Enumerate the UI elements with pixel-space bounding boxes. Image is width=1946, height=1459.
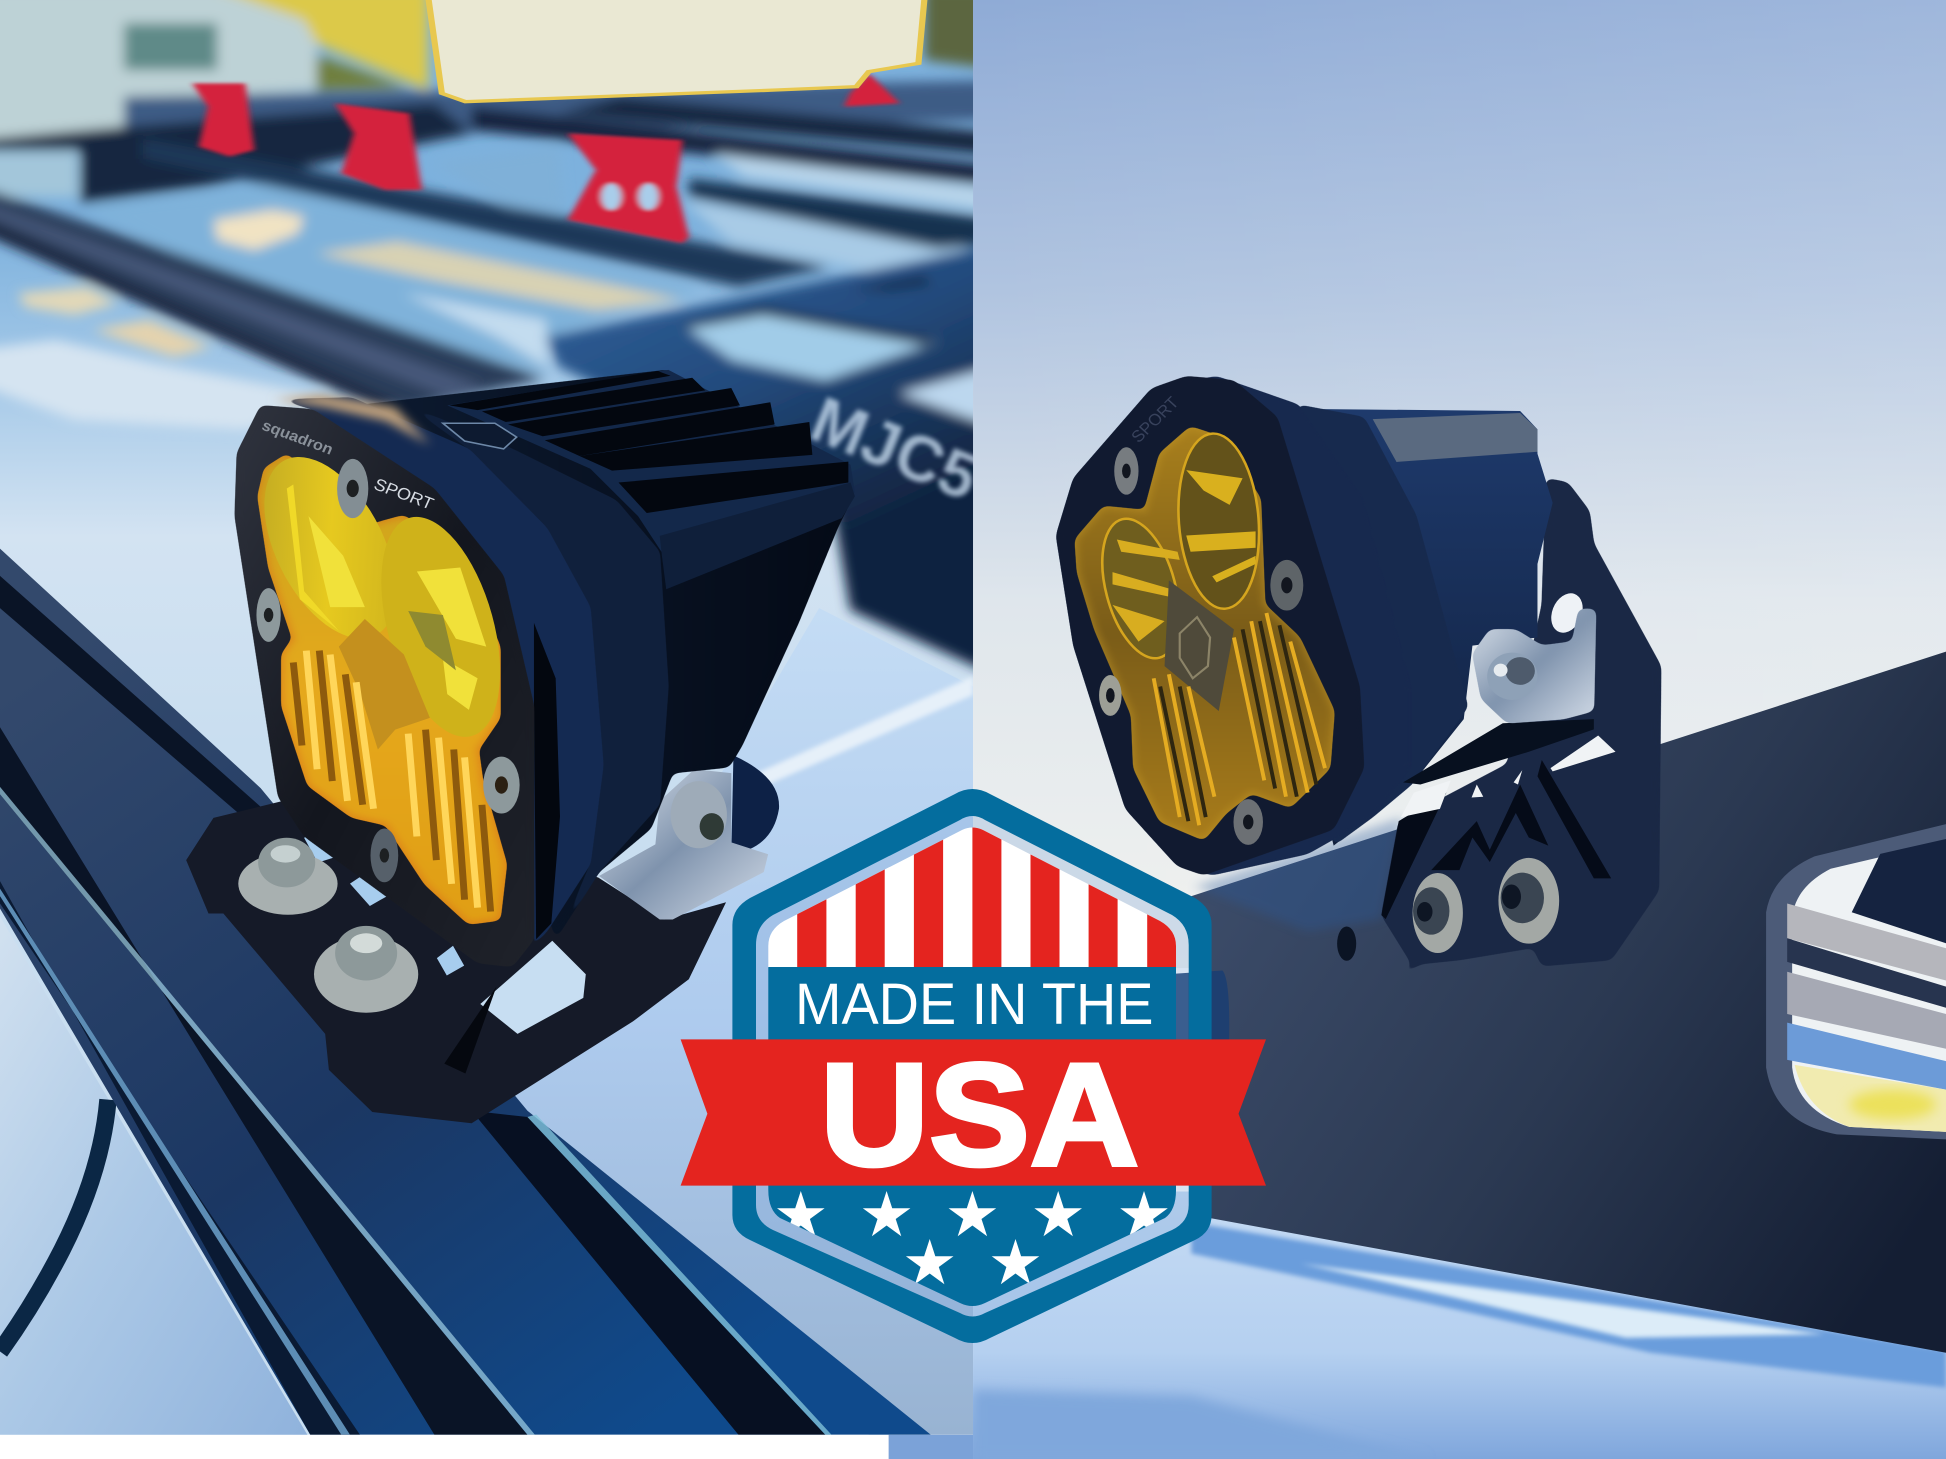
collar black seam bbox=[534, 623, 560, 939]
left lamp bbox=[235, 370, 855, 967]
bracket plate bbox=[1381, 478, 1661, 987]
lower left roof surface bbox=[0, 906, 310, 1440]
centre lens hub bbox=[339, 619, 430, 749]
sky background bbox=[973, 0, 1946, 968]
upper right reflector bbox=[360, 506, 522, 748]
yellow sign side bbox=[211, 0, 428, 90]
building bbox=[0, 0, 316, 140]
blurred rear roof rack scene bbox=[0, 0, 1005, 680]
platform lettering: MJC5 bbox=[801, 383, 988, 514]
plate bolt lower bbox=[314, 926, 418, 1013]
front roof rail bbox=[0, 549, 931, 1435]
platform opening bbox=[683, 308, 937, 380]
lower lens ribs bbox=[293, 651, 491, 912]
top reflector lobe bbox=[1172, 431, 1265, 611]
blue field bbox=[768, 967, 1178, 1312]
black mounting bar bbox=[1191, 652, 1946, 1353]
building window bbox=[124, 23, 217, 70]
panel: right product photo bbox=[889, 0, 1946, 1459]
strip under sign bbox=[124, 80, 1005, 140]
body collar bbox=[1273, 405, 1468, 846]
black cable bbox=[0, 1100, 108, 1352]
lower bolt right bbox=[1498, 858, 1559, 944]
cream sign panel bbox=[428, 0, 925, 102]
lens mounting screws bbox=[1099, 447, 1303, 845]
patches between bars bbox=[714, 153, 1005, 213]
left roof reflections bbox=[19, 287, 118, 315]
fin tops bbox=[447, 370, 855, 556]
reflector highlights bbox=[308, 516, 486, 710]
lens ribs bbox=[1154, 613, 1325, 825]
red ribbon bbox=[681, 1039, 1266, 1186]
left reflector lobe bbox=[1089, 511, 1193, 666]
made in the USA badge bbox=[681, 789, 1266, 1343]
collar outer band bbox=[408, 405, 668, 935]
rail with red mounts bbox=[143, 138, 832, 287]
lower fin ribs bbox=[660, 483, 855, 589]
SPORT lettering: SPORT bbox=[371, 474, 437, 513]
bezel screws bbox=[256, 459, 520, 882]
reflector highlight bbox=[1186, 470, 1256, 582]
top body highlight bbox=[1373, 413, 1537, 462]
collar ring bbox=[278, 398, 603, 967]
bottom strip of the right photo bbox=[889, 1435, 973, 1459]
hood reflections bbox=[973, 1222, 1946, 1459]
left frame bbox=[0, 103, 472, 203]
central roof bbox=[81, 187, 701, 373]
lamp mounting bracket plate bbox=[186, 794, 726, 1123]
badge outer hexagon ring bbox=[732, 789, 1212, 1343]
badge translucent backing bbox=[756, 816, 1189, 1316]
plate bolt upper bbox=[238, 838, 338, 915]
lit bar area below lamp bbox=[1195, 817, 1403, 931]
window at far left bbox=[0, 152, 78, 197]
sky right side lightening bbox=[1501, 0, 1946, 412]
heat sink body bbox=[356, 370, 855, 939]
lamp rear body bbox=[1273, 409, 1553, 846]
left reflector highlight bbox=[1113, 540, 1180, 642]
pivot bolt bbox=[671, 781, 727, 848]
cream blob bbox=[214, 210, 304, 250]
lamp face bezel bbox=[1056, 376, 1364, 875]
silver bracket tab bbox=[599, 769, 768, 919]
stars bbox=[777, 1191, 1168, 1284]
heading: made in the: MADE IN THE bbox=[795, 972, 1154, 1037]
upper left reflector bbox=[237, 439, 423, 656]
silver tab bbox=[1472, 609, 1596, 723]
tab bolt bbox=[1487, 653, 1537, 700]
bracket logo cutout bbox=[1381, 760, 1611, 919]
lower bolt left bbox=[1413, 873, 1463, 953]
flag stripes bbox=[768, 820, 1178, 1312]
rack bar second bbox=[472, 107, 1005, 187]
small bar hole bbox=[1337, 926, 1356, 961]
lamp face bezel bbox=[235, 405, 534, 967]
white bracket slots bbox=[1401, 735, 1616, 817]
platform right patch bbox=[900, 363, 1005, 430]
mounting arm bbox=[1403, 719, 1594, 784]
rear platform bbox=[546, 243, 1005, 680]
top right trees bbox=[925, 0, 1005, 70]
squadron lettering: squadron bbox=[259, 418, 335, 458]
lamp lens bbox=[1076, 427, 1334, 840]
lens centre hex badge bbox=[1165, 580, 1234, 711]
roof background bbox=[0, 0, 973, 1435]
platform dark slot bbox=[683, 277, 937, 345]
rack bar far bbox=[558, 97, 1005, 157]
cream streak bbox=[316, 242, 683, 310]
heading: USA: USA bbox=[820, 1033, 1139, 1196]
lamp lens bbox=[259, 455, 506, 923]
bar window cutout bbox=[1766, 824, 1946, 1139]
rear dark pivot bbox=[731, 755, 779, 854]
lower right roof surface bbox=[496, 608, 973, 1435]
heat sink slots bbox=[449, 371, 848, 513]
rack bar third bbox=[689, 178, 1005, 248]
bracket hole bbox=[1546, 589, 1588, 637]
front rear rail bbox=[0, 185, 546, 410]
lamp face rim bbox=[1056, 376, 1412, 875]
vehicle hood bbox=[973, 1191, 1946, 1459]
right lamp and bracket bbox=[1056, 376, 1661, 987]
blue shape behind badge bbox=[1176, 970, 1230, 1040]
SPORT lettering: SPORT bbox=[1127, 393, 1183, 446]
sign shadow foliage bbox=[316, 55, 410, 90]
collar tan glint bbox=[274, 394, 430, 445]
white roof highlights bbox=[403, 293, 546, 367]
panel: left product photo bbox=[0, 0, 1005, 1440]
logo plate on housing bbox=[443, 423, 517, 449]
red crossbar mounts bbox=[192, 73, 900, 243]
light streak on roof bbox=[751, 676, 973, 788]
